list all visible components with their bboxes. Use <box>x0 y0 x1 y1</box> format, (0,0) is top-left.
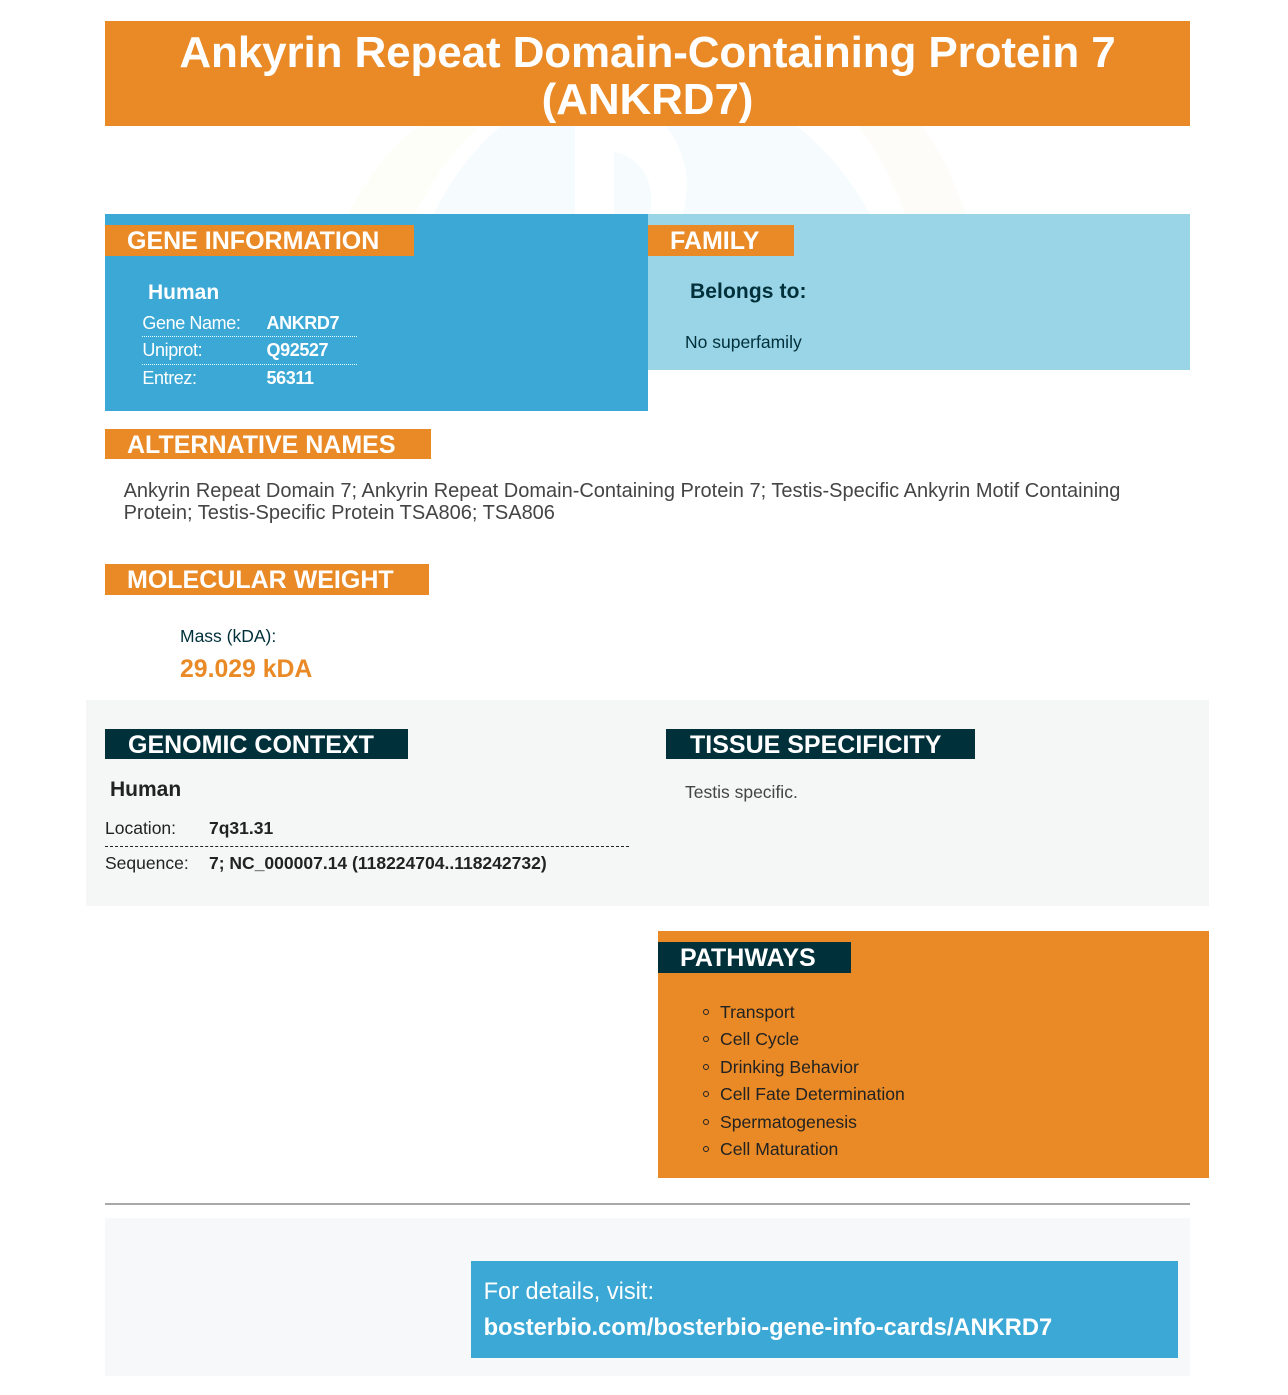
heading: gene information: GENE INFORMATION <box>127 227 379 255</box>
pathway list: Cell Maturation <box>720 1139 838 1159</box>
pathway list <box>703 1002 905 1159</box>
mass label: Mass (kDA): <box>180 626 276 646</box>
panel: genomic context and tissue specificity <box>86 700 1209 906</box>
family value: No superfamily <box>685 332 802 352</box>
heading: pathways <box>658 942 851 973</box>
pathway list: Cell Fate Determination <box>720 1084 905 1104</box>
pathway list: Spermatogenesis <box>720 1112 857 1132</box>
panel: pathways <box>658 931 1209 1178</box>
genomic table: Sequence: <box>105 853 189 873</box>
belongs to label: Belongs to: <box>690 280 807 303</box>
mass value: 29.029 kDA <box>180 656 312 683</box>
call to action <box>471 1261 1178 1358</box>
gene table: Entrez: <box>142 368 197 388</box>
gene table: ANKRD7 <box>266 313 339 333</box>
heading: tissue specificity: TISSUE SPECIFICITY <box>690 731 941 759</box>
gene table: Uniprot: <box>142 340 202 360</box>
pathway list: Drinking Behavior <box>720 1057 859 1077</box>
gene table: Gene Name: <box>142 313 240 333</box>
title <box>105 21 1190 126</box>
species label: Human <box>110 778 181 801</box>
watermark logo <box>434 126 870 214</box>
tissue text: Testis specific. <box>685 782 798 802</box>
heading: family: FAMILY <box>670 227 759 255</box>
visit url: bosterbio.com/bosterbio-gene-info-cards/ANKRD7 <box>484 1315 1052 1341</box>
visit label: For details, visit: <box>484 1279 654 1305</box>
title: (ANKRD7) <box>542 75 753 124</box>
heading: pathways: PATHWAYS <box>680 944 816 972</box>
heading: family <box>648 225 794 256</box>
heading: molecular weight: MOLECULAR WEIGHT <box>127 566 394 594</box>
gene table: 56311 <box>266 368 314 388</box>
panel: gene information <box>105 214 648 411</box>
heading: genomic context: GENOMIC CONTEXT <box>128 731 374 759</box>
genomic table: 7q31.31 <box>209 818 273 838</box>
pathway list: Transport <box>720 1002 795 1022</box>
footer panel <box>105 1218 1190 1376</box>
species label: Human <box>148 281 219 304</box>
genomic table <box>105 818 629 873</box>
alternative names text: Ankyrin Repeat Domain 7; Ankyrin Repeat Domain-Containing Protein 7; Testis-Specific Ankyrin Motif Containing Protein; Testis-Specific Protein TSA806; TSA806 <box>124 480 1120 524</box>
genomic table: Location: <box>105 818 176 838</box>
heading: alternative names: ALTERNATIVE NAMES <box>127 431 396 459</box>
gene table <box>142 313 357 388</box>
genomic table: 7; NC_000007.14 (118224704..118242732) <box>209 853 547 873</box>
panel: family <box>648 214 1190 370</box>
title: Ankyrin Repeat Domain-Containing Protein 7 <box>179 28 1116 77</box>
gene table: Q92527 <box>266 340 328 360</box>
pathway list: Cell Cycle <box>720 1029 799 1049</box>
